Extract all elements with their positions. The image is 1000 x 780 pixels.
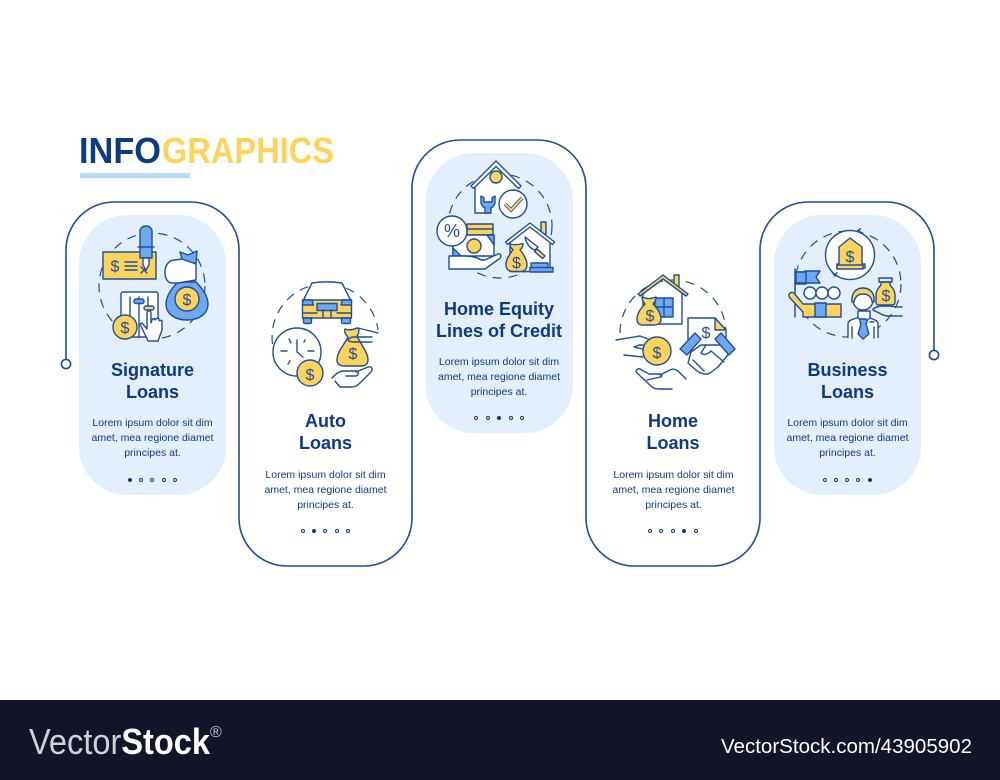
title: INFO [79, 130, 161, 171]
footer image id: VectorStock.com/43905902 [721, 735, 972, 758]
text: business loans body: Lorem ipsum dolor sit dim [787, 417, 908, 429]
text: business loans body: principes at. [819, 447, 876, 459]
icon: auto loans: $ [306, 367, 315, 384]
icon: home equity lines of credit: % [444, 221, 460, 241]
icon: home equity lines of credit: $ [512, 255, 521, 272]
icon: home loans: $ [646, 308, 655, 325]
heading: signature loans: Signature [111, 360, 194, 380]
footer bar [0, 700, 1000, 780]
text: home loans body: amet, mea regione diamet [613, 484, 735, 496]
icon: signature loans: $ [183, 292, 192, 309]
text: signature loans body: principes at. [124, 447, 181, 459]
text: home loans body: Lorem ipsum dolor sit dim [613, 469, 734, 481]
text: signature loans body: Lorem ipsum dolor sit dim [92, 417, 213, 429]
footer logo: ® [210, 724, 222, 741]
connecting outline [61, 140, 939, 566]
pagination dots 5 [824, 478, 872, 482]
icon: signature loans [99, 226, 208, 341]
panel: light background home equity [426, 153, 573, 433]
icon: business loans [789, 228, 902, 339]
title: GRAPHICS [162, 130, 334, 171]
heading: home loans: Home [648, 411, 698, 431]
icon: home loans: $ [653, 345, 662, 362]
text: home equity body: principes at. [471, 386, 527, 398]
panel: light background signature loans [79, 215, 226, 495]
heading: business loans: Loans [821, 382, 874, 402]
panel: light background business loans [774, 215, 921, 495]
text: auto loans body: amet, mea regione diamet [265, 484, 387, 496]
icon: home loans: $ [702, 325, 711, 342]
icon: signature loans: $ [121, 320, 130, 337]
text: home loans body: principes at. [645, 499, 702, 511]
text: auto loans body: Lorem ipsum dolor sit dim [265, 469, 386, 481]
icon: business loans: $ [846, 249, 855, 266]
title [79, 130, 334, 178]
pagination dots 3 [474, 416, 524, 420]
heading: auto loans: Auto [305, 411, 346, 431]
icon: business loans: $ [882, 288, 891, 305]
pagination dots 4 [648, 530, 698, 532]
icon: auto loans [272, 282, 378, 387]
icon: home equity lines of credit [437, 161, 554, 278]
heading: auto loans: Loans [299, 433, 352, 453]
text: business loans body: amet, mea regione diamet [787, 432, 909, 444]
icon: auto loans: $ [349, 346, 358, 363]
icon: signature loans: $ [111, 258, 120, 276]
pagination dots 2 [302, 530, 350, 532]
text: home equity body: amet, mea regione diamet [438, 371, 560, 383]
heading: home equity: Home Equity [444, 299, 554, 319]
heading: business loans: Business [807, 360, 888, 380]
heading: home equity: Lines of Credit [436, 321, 562, 341]
text: home equity body: Lorem ipsum dolor sit dim [439, 356, 559, 368]
icon: home loans [616, 275, 735, 389]
text: signature loans body: amet, mea regione diamet [92, 432, 214, 444]
text: auto loans body: principes at. [297, 499, 354, 511]
pagination dots 1 [128, 478, 176, 482]
heading: home loans: Loans [646, 433, 700, 453]
heading: signature loans: Loans [126, 382, 179, 402]
footer logo: VectorStock [29, 721, 211, 762]
